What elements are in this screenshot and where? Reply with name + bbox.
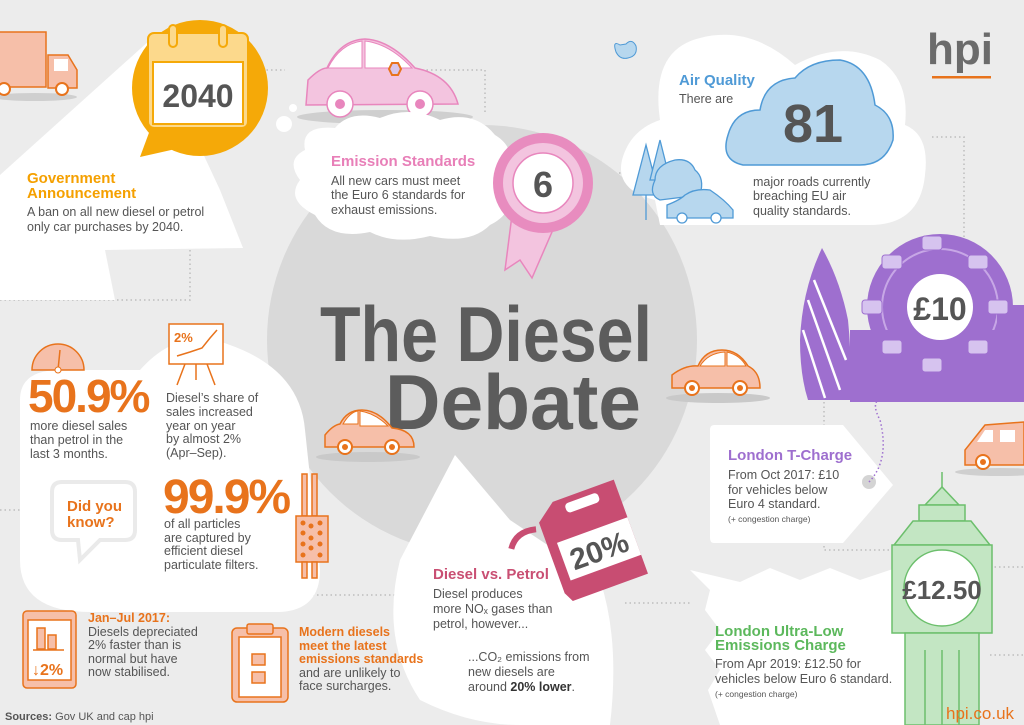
panel: london t-charge tag: for vehicles below	[728, 483, 828, 497]
text: diesel share: (Apr–Sep).	[166, 446, 226, 460]
panel: london t-charge tag: London T-Charge	[728, 447, 852, 464]
text: diesel vs petrol: ...CO₂ emissions from	[468, 650, 590, 664]
text: diesel vs petrol: petrol, however...	[433, 617, 528, 631]
text: 50.9%	[28, 370, 150, 461]
panel: emission standards cloud: Emission Standards	[331, 153, 475, 170]
panel: emission standards cloud: exhaust emissions.	[331, 203, 437, 217]
icon: jerry can 20%	[501, 480, 648, 615]
text: jan-jul 2017: normal but have	[88, 652, 178, 666]
icon: london skyline purple	[800, 234, 1024, 402]
text: diesel share	[166, 391, 259, 460]
text: modern diesels: Modern diesels	[299, 625, 390, 639]
title: The Diesel	[320, 290, 652, 378]
text: diesel vs petrol: new diesels are	[468, 665, 555, 679]
icon: easel 2%: 2%	[174, 330, 193, 345]
text: jan-jul 2017: Jan–Jul 2017:	[88, 611, 170, 625]
text: 99.9%: particulate filters.	[164, 558, 258, 572]
text: modern diesels: face surcharges.	[299, 679, 391, 693]
icon: rosette 6: 6	[533, 164, 553, 205]
text: jan-jul 2017: 2% faster than is	[88, 638, 181, 652]
icon: speedometer	[32, 344, 84, 373]
icon: orange car left	[316, 410, 420, 462]
icon: calendar 2040	[132, 20, 268, 157]
icon: tablet: ↓2%	[32, 662, 63, 679]
text: government announcement: only car purchases by 2040.	[27, 220, 183, 234]
text: government announcement	[27, 170, 204, 234]
text: government announcement: Announcement	[27, 185, 136, 202]
icon: tablet	[23, 611, 76, 688]
text: 50.9%: 50.9%	[28, 370, 150, 422]
text: modern diesels: meet the latest	[299, 639, 387, 653]
sources: Sources: Gov UK and cap hpi	[5, 711, 154, 723]
panel: air quality cloud	[621, 35, 926, 225]
icon: big ben	[892, 472, 992, 725]
diesel vs petrol white drop	[393, 455, 613, 725]
text: government announcement: A ban on all new diesel or petrol	[27, 205, 204, 219]
panel: london t-charge tag	[710, 400, 893, 543]
callout: did you know: know?	[67, 514, 114, 531]
icon: trees and blue car	[633, 140, 733, 223]
text: ULEZ: London Ultra-Low	[715, 623, 844, 640]
panel: air quality cloud: major roads currently	[753, 175, 871, 189]
title: Debate	[385, 358, 641, 446]
ULEZ white spiky shape	[690, 565, 905, 725]
icon: truck	[0, 32, 77, 101]
icon: butterfly	[615, 41, 636, 58]
text: diesel share: sales increased	[166, 405, 253, 419]
text: diesel vs petrol: around 20% lower.	[468, 680, 575, 694]
text: 99.9%	[163, 471, 290, 572]
text: jan-jul 2017	[88, 611, 198, 679]
text: modern diesels: and are unlikely to	[299, 666, 401, 680]
icon: orange car right	[666, 350, 770, 403]
text: 50.9%: than petrol in the	[30, 433, 123, 447]
text: ULEZ: vehicles below Euro 6 standard.	[715, 672, 892, 686]
text: ULEZ: (+ congestion charge)	[715, 689, 798, 699]
icon: orange van	[955, 422, 1024, 476]
panel: emission standards cloud: the Euro 6 standards for	[331, 188, 465, 202]
icon: particulate filter	[296, 474, 328, 578]
url: hpi.co.uk	[946, 704, 1015, 723]
panel: air quality cloud: quality standards.	[753, 204, 851, 218]
text: 99.9%: of all particles	[164, 517, 240, 531]
text: diesel share: year on year	[166, 419, 235, 433]
text: diesel vs petrol: Diesel produces	[433, 587, 523, 601]
white megaphone shape	[0, 40, 243, 300]
text: jan-jul 2017: now stabilised.	[88, 665, 170, 679]
callout: did you know: Did you	[67, 498, 122, 515]
icon: calendar 2040: 2040	[162, 78, 234, 114]
big grey circle	[267, 125, 697, 555]
title	[320, 290, 652, 446]
icon: big ben: £12.50	[902, 575, 982, 605]
text: 99.9%: 99.9%	[163, 471, 290, 524]
logo: hpi: hpi	[927, 25, 993, 74]
text: ULEZ: Emissions Charge	[715, 637, 846, 654]
icon: pink car	[276, 39, 473, 132]
text: government announcement: Government	[27, 170, 115, 187]
panel: air quality cloud: 81	[783, 94, 843, 154]
icon: london skyline purple: £10	[913, 291, 967, 327]
text: 50.9%: last 3 months.	[30, 447, 108, 461]
panel: london t-charge tag: From Oct 2017: £10	[728, 468, 839, 482]
text: jan-jul 2017: Diesels depreciated	[88, 625, 198, 639]
panel: air quality cloud: breaching EU air	[753, 189, 846, 203]
text: diesel vs petrol	[433, 566, 590, 694]
panel: air quality cloud: There are	[679, 92, 733, 106]
icon: jerry can 20%: 20%	[566, 526, 633, 577]
icon: clipboard	[232, 624, 288, 702]
text: diesel vs petrol: more NOₓ gases than	[433, 602, 552, 616]
text: diesel share: Diesel’s share of	[166, 391, 259, 405]
text: ULEZ	[715, 623, 892, 699]
text: diesel share: by almost 2%	[166, 432, 241, 446]
icon: rosette 6	[493, 133, 593, 278]
icon: easel 2%	[169, 324, 223, 385]
text: modern diesels	[299, 625, 423, 693]
text: 99.9%: efficient diesel	[164, 544, 243, 558]
text: 50.9%: more diesel sales	[30, 419, 127, 433]
callout: did you know	[52, 482, 135, 560]
text: diesel vs petrol: Diesel vs. Petrol	[433, 566, 549, 583]
panel: emission standards cloud	[294, 112, 511, 240]
text: 99.9%: are captured by	[164, 531, 252, 545]
panel: london t-charge tag: Euro 4 standard.	[728, 497, 820, 511]
panel: london t-charge tag: (+ congestion charge)	[728, 514, 811, 524]
text: ULEZ: From Apr 2019: £12.50 for	[715, 657, 861, 671]
text: modern diesels: emissions standards	[299, 652, 423, 666]
panel: air quality cloud: Air Quality	[679, 72, 756, 89]
left white panel	[20, 339, 320, 612]
panel: emission standards cloud: All new cars must meet	[331, 174, 461, 188]
